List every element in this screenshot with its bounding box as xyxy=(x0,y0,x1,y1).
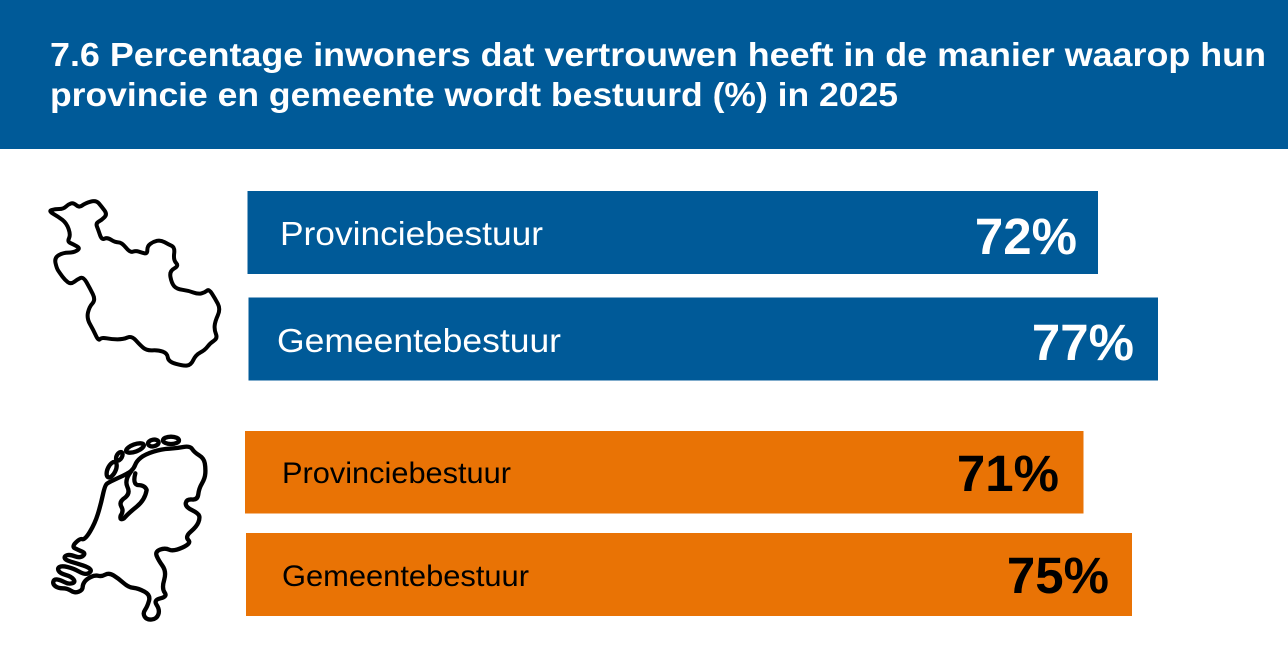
bar: municipal government, province xyxy=(248,298,1158,380)
bar: province government, Netherlands: 71% xyxy=(957,445,1059,502)
bar: province government, province xyxy=(248,191,1098,274)
bar: municipal government, Netherlands: Gemeentebestuur xyxy=(282,560,529,593)
bar: province government, province: 72% xyxy=(975,208,1077,265)
bar: province government, province: Provinciebestuur xyxy=(280,215,543,252)
title banner xyxy=(0,0,1288,149)
icon: Netherlands map outline xyxy=(53,437,205,620)
bar: municipal government, province: Gemeentebestuur xyxy=(277,322,561,359)
bar: province government, Netherlands xyxy=(245,431,1084,514)
icon: province map outline xyxy=(50,201,219,366)
title: provincie en gemeente wordt bestuurd (%) in 2025 xyxy=(50,76,898,113)
bar: municipal government, province: 77% xyxy=(1032,314,1134,371)
bar: province government, Netherlands: Provinciebestuur xyxy=(282,457,511,490)
bar: municipal government, Netherlands: 75% xyxy=(1007,547,1109,604)
title xyxy=(50,36,1266,113)
bar: municipal government, Netherlands xyxy=(246,533,1132,616)
title: 7.6 Percentage inwoners dat vertrouwen heeft in de manier waarop hun xyxy=(50,36,1266,73)
